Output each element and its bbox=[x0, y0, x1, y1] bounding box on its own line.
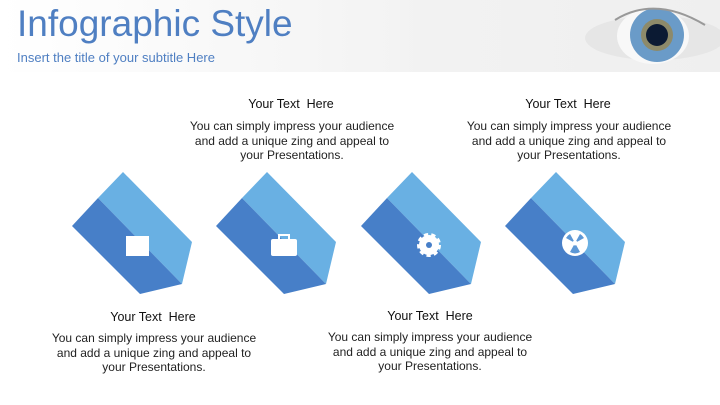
title: Infographic Style bbox=[17, 3, 293, 44]
text bottom 1: your Presentations. bbox=[102, 360, 206, 374]
icon: briefcase bbox=[271, 235, 297, 256]
icon: radiation bbox=[562, 230, 588, 256]
heading bottom 1: Your Text Here bbox=[110, 310, 196, 324]
icon: notepad bbox=[126, 236, 149, 256]
text top 2 bbox=[467, 119, 671, 162]
shape 1 bbox=[72, 172, 192, 294]
text top 2: and add a unique zing and appeal to bbox=[472, 134, 666, 148]
text top 1: and add a unique zing and appeal to bbox=[195, 134, 389, 148]
text top 1 bbox=[190, 119, 394, 162]
subtitle: Insert the title of your subtitle Here bbox=[17, 50, 215, 65]
icon: gear bbox=[419, 235, 439, 255]
text top 1: your Presentations. bbox=[240, 148, 344, 162]
shape 3 bbox=[361, 172, 481, 294]
text top 2: You can simply impress your audience bbox=[467, 119, 671, 133]
text bottom 1: You can simply impress your audience bbox=[52, 331, 256, 345]
heading top 2: Your Text Here bbox=[525, 97, 611, 111]
text bottom 2: You can simply impress your audience bbox=[328, 330, 532, 344]
shape 2 bbox=[216, 172, 336, 294]
text bottom 2: and add a unique zing and appeal to bbox=[333, 344, 527, 358]
eye image bbox=[585, 8, 720, 64]
heading bottom 2: Your Text Here bbox=[387, 309, 473, 323]
text bottom 1 bbox=[52, 331, 256, 374]
text bottom 1: and add a unique zing and appeal to bbox=[57, 346, 251, 360]
text top 2: your Presentations. bbox=[517, 148, 621, 162]
shape 4 bbox=[505, 172, 625, 294]
heading top 1: Your Text Here bbox=[248, 97, 334, 111]
header band bbox=[0, 0, 720, 72]
text bottom 2: your Presentations. bbox=[378, 359, 482, 373]
text top 1: You can simply impress your audience bbox=[190, 119, 394, 133]
text bottom 2 bbox=[328, 330, 532, 373]
